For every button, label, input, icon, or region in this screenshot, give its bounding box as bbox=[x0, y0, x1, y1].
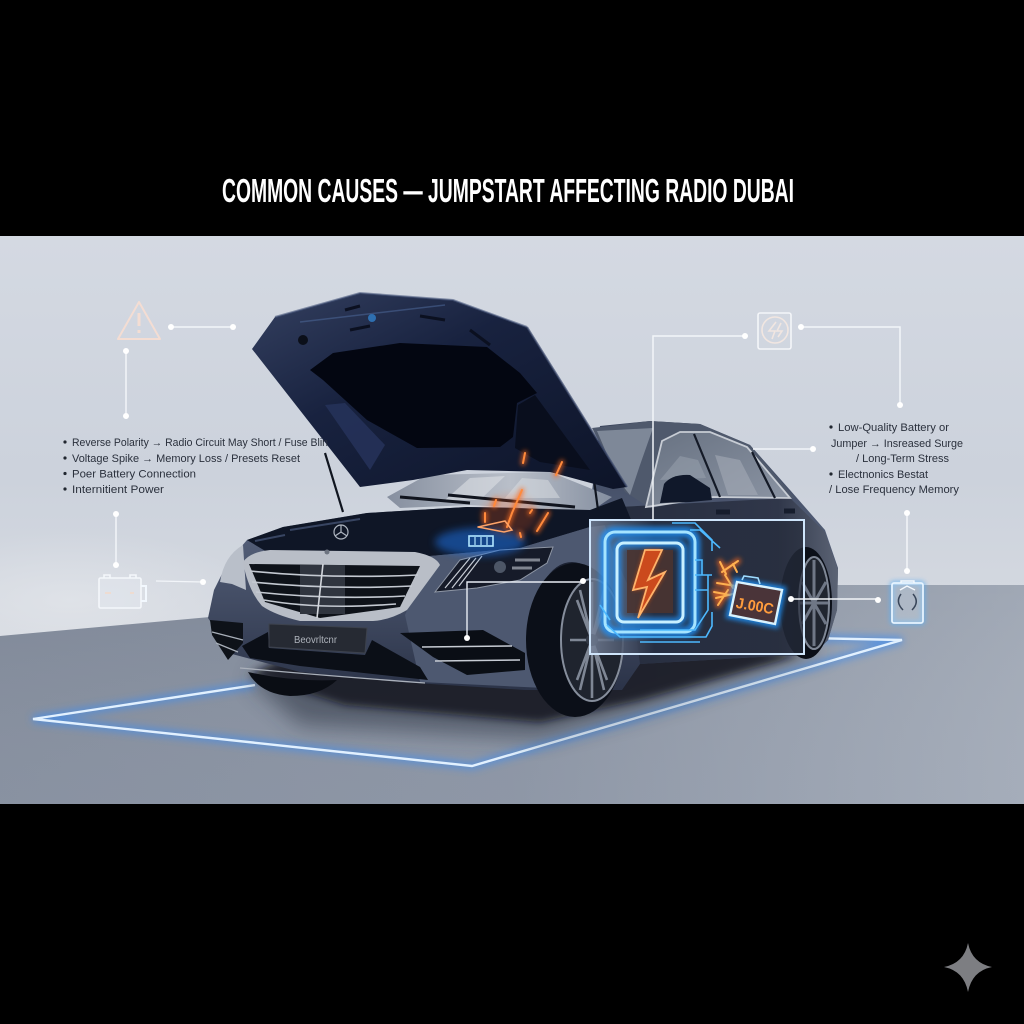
connector: right text to clip icon bbox=[904, 510, 910, 574]
circuit chip glow bbox=[605, 532, 695, 632]
right fog lamp bbox=[400, 630, 525, 675]
grille bbox=[243, 550, 440, 621]
icon: warning triangle bbox=[118, 302, 160, 339]
right bullets bbox=[829, 425, 833, 476]
text block: left causes: Voltage Spike → Memory Loss / Presets Reset bbox=[72, 453, 300, 465]
car body bbox=[208, 421, 838, 690]
open hood bbox=[252, 293, 627, 489]
side windows bbox=[646, 432, 790, 507]
text block: right causes: Electnonics Bestat bbox=[838, 469, 928, 481]
windshield bbox=[387, 428, 653, 512]
text block: right causes: / Lose Frequency Memory bbox=[829, 484, 960, 496]
panel: studio scene bbox=[0, 236, 1024, 804]
text block: right causes: Jumper → Insreased Surge bbox=[831, 438, 963, 450]
studio floor bbox=[0, 585, 1024, 804]
text block: right causes: / Long-Term Stress bbox=[856, 453, 949, 465]
wall highlight bbox=[0, 530, 260, 670]
connector: battery icon horizontal bbox=[156, 579, 206, 585]
side mirror bbox=[660, 475, 712, 503]
neon battery bbox=[730, 576, 782, 624]
front bumper shading bbox=[405, 527, 612, 688]
text block: left causes: Internitient Power bbox=[72, 484, 164, 496]
roof bbox=[592, 421, 795, 508]
connector: callout to clip icon bbox=[788, 596, 881, 603]
lightning bolt bbox=[633, 550, 665, 618]
icon: surge circle bbox=[758, 313, 791, 349]
glowing floor outline bbox=[33, 637, 902, 766]
studio wall bbox=[0, 236, 1024, 636]
engine sparks bbox=[478, 453, 562, 537]
left bullets bbox=[63, 440, 67, 491]
connector: surge icon to callout bbox=[653, 333, 748, 520]
door handles bbox=[716, 511, 795, 512]
icon: four-point sparkle watermark bbox=[944, 943, 992, 992]
connector: warning icon horizontal bbox=[168, 324, 236, 330]
rear wheel bbox=[780, 547, 832, 659]
left fog lamp bbox=[210, 620, 243, 660]
number plate: Beovrltcnr bbox=[294, 635, 338, 646]
hood struts bbox=[325, 450, 598, 512]
blue glow at engine bay bbox=[435, 528, 525, 556]
front splitter bbox=[240, 668, 425, 683]
small battery glow label bbox=[469, 536, 493, 546]
lower air intake bbox=[242, 632, 428, 680]
connector: left text to battery icon bbox=[113, 511, 119, 568]
connector: surge icon to right text bbox=[798, 324, 903, 408]
text block: left causes: Poer Battery Connection bbox=[72, 468, 196, 480]
side door panel bbox=[600, 498, 838, 664]
connector: headlight to callout bbox=[464, 578, 586, 641]
neon battery: J.00C bbox=[735, 595, 775, 618]
bonnet emblem bbox=[334, 525, 348, 539]
callout frame bbox=[590, 520, 804, 654]
main headlight bbox=[435, 547, 553, 592]
bay highlights bbox=[255, 519, 360, 541]
text block: left causes: Reverse Polarity → Radio Circuit May Short / Fuse Blin bbox=[72, 437, 328, 449]
icon: battery clamp bbox=[892, 581, 923, 623]
connector: roof to right text bbox=[753, 446, 816, 452]
right front wheel bbox=[526, 563, 624, 717]
icon: battery outline bbox=[99, 575, 146, 608]
car shadow bbox=[250, 630, 830, 738]
orange sparks bbox=[714, 561, 738, 605]
left front tyre bbox=[248, 672, 337, 696]
panel: holographic circuit callout bbox=[590, 520, 804, 654]
number plate bbox=[269, 624, 367, 653]
text block: left causes bbox=[63, 437, 328, 496]
connector: warning icon to left text bbox=[123, 348, 129, 419]
car bbox=[208, 293, 838, 717]
wheel arch shadow bbox=[532, 562, 612, 698]
left headlight bbox=[220, 545, 246, 590]
text block: right causes bbox=[829, 422, 963, 496]
text block: right causes: Low-Quality Battery or bbox=[838, 422, 949, 434]
circuit traces bbox=[600, 523, 720, 642]
engine bay bbox=[247, 498, 632, 556]
